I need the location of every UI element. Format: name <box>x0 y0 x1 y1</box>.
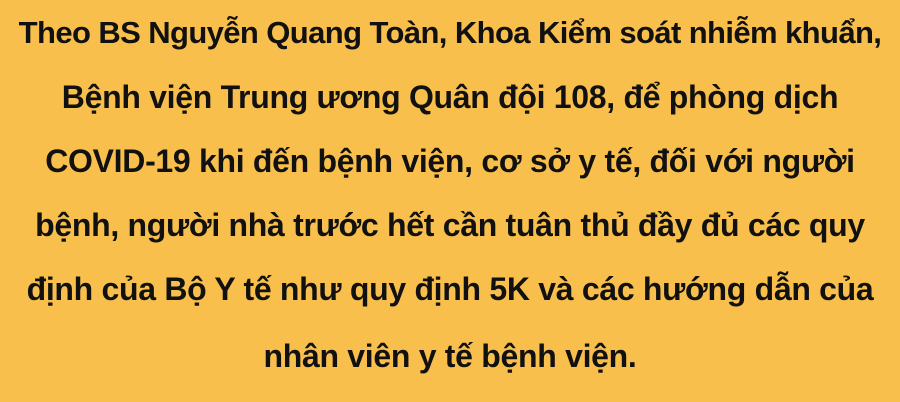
text block: quote: Theo BS Nguyễn Quang Toàn, Khoa Kiểm soát nhiễm khuẩn, <box>19 15 881 50</box>
text block: quote: nhân viên y tế bệnh viện. <box>263 338 637 374</box>
text block: quote: bệnh, người nhà trước hết cần tuân thủ đầy đủ các quy <box>35 207 865 243</box>
text block: quote: COVID-19 khi đến bệnh viện, cơ sở y tế, đối với người <box>45 143 855 179</box>
text block: quote: Bệnh viện Trung ương Quân đội 108, để phòng dịch <box>62 79 838 115</box>
text block: quote: định của Bộ Y tế như quy định 5K và các hướng dẫn của <box>27 271 873 307</box>
